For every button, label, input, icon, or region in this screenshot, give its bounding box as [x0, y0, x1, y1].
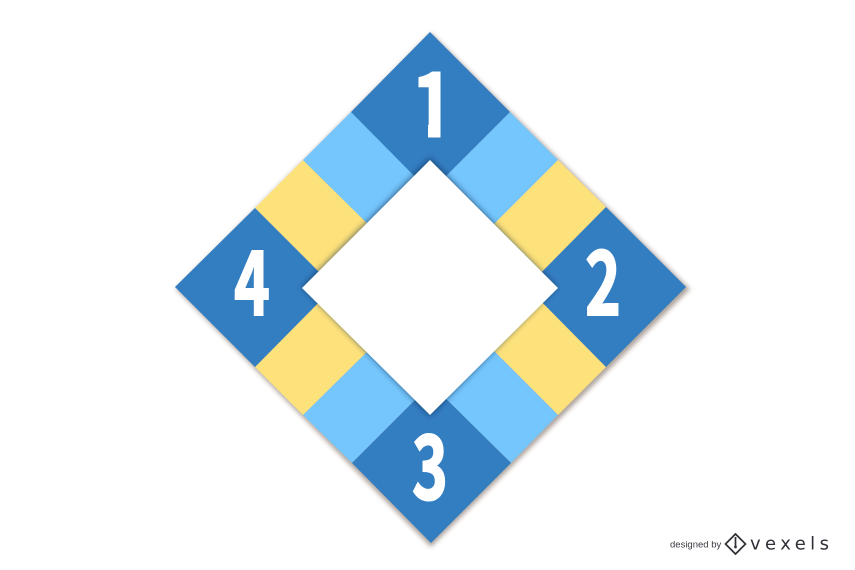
band: upper right yellow — [479, 160, 606, 287]
band: lower right yellow — [479, 287, 606, 415]
diamond ring — [175, 32, 686, 543]
center white diamond — [302, 160, 558, 415]
credit text: designed by — [670, 540, 721, 550]
outer drop shadow — [176, 33, 690, 547]
band: lower left yellow — [255, 287, 383, 415]
number 3: 3 — [412, 397, 448, 525]
vexels wordmark: vexels — [750, 534, 833, 554]
band: upper left light blue — [303, 112, 431, 239]
center shadow — [302, 158, 557, 416]
band: lower left light blue — [303, 336, 431, 463]
band: upper right light blue — [431, 112, 558, 239]
band: upper left yellow — [255, 160, 383, 287]
icon: vexels logo — [726, 534, 746, 554]
panel: step 4 — [175, 208, 334, 367]
panel: step 2 — [527, 207, 686, 367]
number 1: 1 — [411, 33, 456, 162]
band: lower right light blue — [431, 336, 558, 463]
panel: step 1 — [351, 32, 510, 192]
number 4: 4 — [234, 212, 270, 341]
diamond infographic canvas — [174, 32, 828, 556]
number 2: 2 — [585, 212, 621, 341]
panel: step 3 — [352, 384, 511, 543]
credit: designed by vexels — [670, 534, 833, 554]
